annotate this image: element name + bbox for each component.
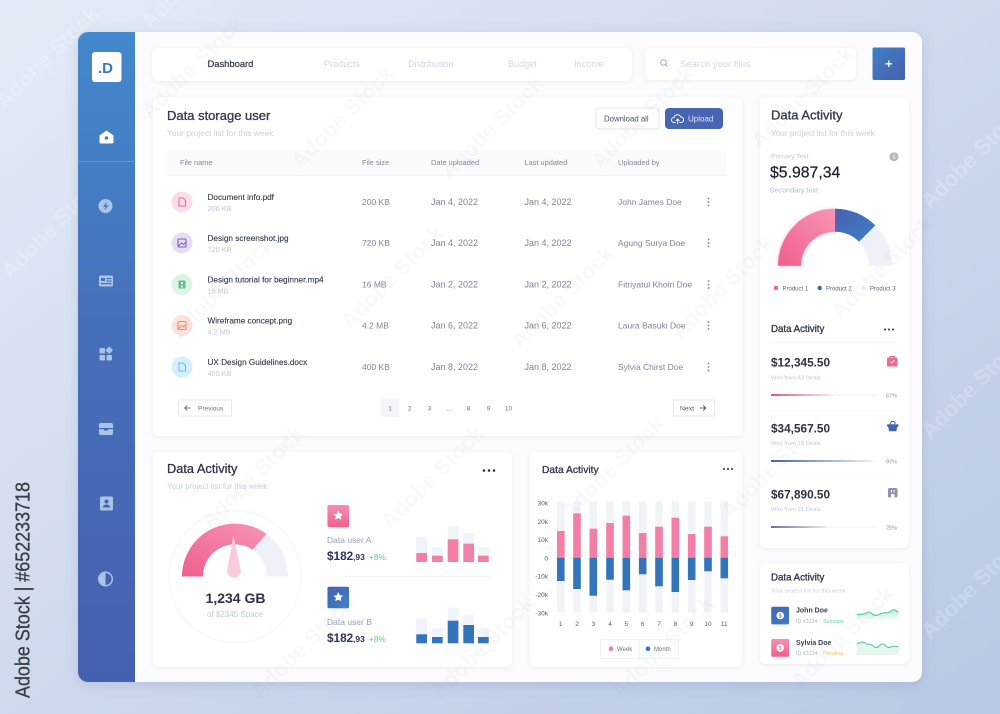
deal metric 2: Won from 18 Deals — [771, 441, 821, 447]
subheading: Your project list for this week — [771, 129, 876, 138]
watermark: Adobe Stock — [506, 240, 619, 354]
subheading: Your project list for this week — [167, 128, 274, 138]
search bar — [645, 48, 856, 80]
panel: storage gauge and users — [153, 452, 512, 667]
watermark: Adobe Stock — [136, 10, 249, 124]
watermark: Adobe Stock — [586, 60, 699, 174]
previous button: Previous — [198, 405, 224, 412]
user Sylvia: ID #3124 · — [796, 651, 821, 657]
nav bar — [152, 48, 632, 81]
bars — [557, 502, 728, 612]
donut legend: Product 3 — [870, 286, 896, 292]
upload button — [665, 108, 723, 129]
pagination — [381, 398, 512, 417]
sparkline Sylvia — [857, 642, 898, 655]
watermark: Adobe Stock — [286, 60, 399, 174]
table row 4: Jan 6, 2022 — [524, 320, 572, 330]
icon: contrast — [98, 572, 113, 586]
axis labels: 9 — [690, 621, 694, 628]
heading: Data Activity — [542, 465, 600, 476]
table row 5: Jan 8, 2022 — [431, 362, 478, 372]
deal metric 2 — [771, 421, 898, 465]
data user A — [327, 505, 386, 563]
deal metric 3: $67,890.50 — [771, 487, 830, 501]
stock credit: Adobe Stock | #652233718 — [12, 482, 34, 698]
table row 5: 400 KB — [362, 362, 390, 372]
data user B: Data user B — [327, 617, 372, 627]
sparkline John — [857, 610, 898, 619]
user Sylvia: $ — [779, 646, 782, 652]
logo: .D — [98, 60, 113, 77]
watermark — [136, 10, 939, 704]
nav bar: Distribution — [408, 59, 454, 69]
table row 4: Laura Basuki Doe — [618, 320, 686, 330]
heading: Data storage user — [167, 108, 271, 123]
watermark: Adobe Stock — [246, 590, 359, 704]
panel: data storage table — [153, 97, 742, 436]
user John: $ — [779, 614, 782, 620]
icon: briefcase — [887, 356, 898, 366]
legend — [600, 640, 678, 658]
axis labels: 5 — [624, 621, 628, 628]
table header: Uploaded by — [618, 158, 660, 167]
table header: Date uploaded — [431, 158, 479, 167]
axis labels: 2 — [575, 621, 579, 628]
primary metric — [770, 154, 840, 194]
data user A: +8% — [369, 552, 386, 562]
deal metric 2: $34,567.50 — [771, 421, 830, 435]
table row 2: Jan 4, 2022 — [524, 238, 572, 248]
watermark: Adobe Stock — [606, 590, 719, 704]
data user B: ,93 — [353, 634, 365, 644]
table header: File size — [362, 158, 389, 167]
table header: Last updated — [524, 158, 567, 167]
sidebar — [78, 32, 135, 682]
upload button: Upload — [688, 114, 713, 124]
table row 1: Document info.pdf — [208, 193, 275, 202]
table row 4: Jan 6, 2022 — [431, 320, 478, 330]
menu dots — [884, 328, 894, 330]
gauge chart — [169, 510, 301, 642]
axis labels: -30k — [535, 610, 549, 618]
deal metric 1: 67% — [886, 394, 897, 400]
watermark: Adobe Stock — [556, 410, 669, 524]
watermark: Adobe Stock — [786, 580, 899, 694]
user Sylvia: Pending — [823, 651, 843, 657]
user John — [771, 607, 844, 625]
icon: bolt — [98, 199, 112, 213]
data user B: +8% — [369, 634, 386, 644]
pagination: 8 — [467, 405, 471, 412]
data user B — [327, 587, 386, 645]
table row 1: Jan 4, 2022 — [524, 197, 572, 207]
deal metric 3: Won from 21 Deals — [771, 507, 821, 513]
table row 5 — [172, 356, 709, 378]
donut legend: Product 2 — [826, 286, 852, 292]
table row 2: Agung Surya Doe — [618, 238, 685, 248]
heading: Data Activity — [167, 461, 238, 476]
axis labels: 30k — [538, 500, 549, 508]
primary metric: Secondary text — [770, 186, 818, 194]
deal metric 3 — [771, 487, 898, 531]
menu dots — [483, 469, 495, 472]
axis labels: -10k — [535, 574, 549, 580]
deal metric 3: 25% — [886, 525, 897, 531]
axis labels: 4 — [608, 621, 612, 628]
user John: Success — [823, 619, 844, 625]
add button — [872, 48, 905, 80]
axis labels: 1 — [559, 621, 563, 628]
table row 3: 16 MB — [362, 280, 387, 290]
table row 5: UX Design Guidelines.docx — [208, 358, 307, 367]
user Sylvia: Sylvia Doe — [796, 640, 832, 647]
nav bar: Income — [574, 59, 604, 69]
donut chart — [778, 209, 892, 266]
panel: recent activity — [760, 563, 909, 664]
mini bar chart A — [416, 526, 489, 562]
axis labels: 10 — [704, 621, 712, 628]
table row 3 — [172, 274, 709, 296]
axis labels: 8 — [673, 621, 677, 628]
heading: Data Activity — [771, 108, 843, 122]
table row 1: John James Doe — [618, 197, 682, 207]
table row 1 — [172, 192, 709, 213]
watermark: Adobe Stock — [716, 410, 829, 524]
axis labels: 0 — [544, 556, 548, 562]
nav bar: Dashboard — [208, 58, 253, 69]
legend: Week — [617, 647, 633, 653]
primary metric: Primary Text — [771, 154, 809, 160]
pagination: 10 — [505, 405, 512, 412]
axis labels: 7 — [657, 621, 661, 628]
watermark: Adobe Stock — [336, 220, 449, 334]
watermark: Adobe Stock — [426, 590, 539, 704]
user John: ID #3124 · — [796, 619, 821, 625]
table row 3: Jan 2, 2022 — [524, 280, 572, 290]
table row 3: Fitriyatul Khoiri Doe — [618, 280, 692, 290]
table row 4: 4.2 MB — [362, 320, 389, 330]
table header: File name — [180, 158, 212, 167]
deal metric 2: 97% — [886, 459, 897, 465]
table row 1: 200 KB — [208, 204, 232, 213]
panel: diverging bar chart — [530, 452, 742, 667]
axis labels: 3 — [591, 621, 595, 628]
subheading: Your project list for this week — [167, 482, 267, 491]
deal metric 1: $12,345.50 — [771, 356, 830, 370]
heading: Data Activity — [771, 573, 824, 584]
table row 3: Design tutorial for beginner.mp4 — [208, 276, 324, 284]
icon: id card — [99, 276, 113, 286]
table row 4 — [172, 315, 709, 336]
watermark: Adobe Stock — [666, 230, 779, 344]
mini bar chart B — [416, 608, 489, 643]
axis labels: 6 — [641, 621, 645, 628]
menu dots — [723, 468, 733, 470]
deal metric 1: Won from 43 Deals — [771, 376, 821, 382]
watermark: Adobe Stock — [196, 420, 309, 534]
panel: right summary column — [760, 97, 909, 548]
search bar: Search your files — [680, 59, 751, 70]
watermark: Adobe Stock — [746, 40, 859, 154]
table row 5: 400 KB — [208, 369, 232, 378]
data user A: Data user A — [327, 535, 372, 545]
table row 5: Sylvia Chirst Doe — [618, 362, 683, 372]
legend: Month — [654, 647, 671, 653]
axis labels — [535, 500, 728, 628]
table row 1: Jan 4, 2022 — [431, 197, 478, 207]
watermark: Adobe Stock — [436, 70, 549, 184]
data user B: $182 — [327, 631, 354, 645]
section heading: Data Activity — [771, 324, 824, 335]
nav bar: Products — [324, 59, 360, 69]
axis labels: 20k — [538, 519, 549, 526]
table row 4: Wireframe concept.png — [208, 316, 293, 326]
table row 2: 720 KB — [208, 245, 232, 254]
nav bar: Budget — [508, 59, 537, 69]
user John: John Doe — [796, 607, 828, 614]
axis labels: 10k — [538, 537, 549, 544]
watermark: Adobe Stock — [376, 420, 489, 534]
next button — [674, 400, 714, 416]
pagination: 1 — [388, 405, 392, 412]
dashboard window — [78, 32, 922, 682]
logo — [92, 52, 122, 82]
pagination: ... — [447, 405, 452, 412]
icon: store — [888, 488, 898, 498]
primary metric: $5.987,34 — [770, 164, 840, 182]
pagination: 2 — [408, 405, 412, 412]
table row 2 — [172, 232, 709, 254]
icon: search — [661, 60, 668, 67]
table row 3: 16 MB — [208, 286, 229, 296]
next button: Next — [680, 405, 694, 412]
icon: basket — [887, 422, 898, 431]
gauge chart: 1,234 GB — [206, 590, 265, 606]
data user A: ,93 — [353, 552, 365, 562]
table row 2: Design screenshot.jpg — [208, 234, 289, 243]
gauge chart: of $2345 Space — [207, 610, 264, 619]
watermark: Adobe Stock — [826, 210, 939, 324]
watermark: Adobe Stock — [166, 230, 279, 344]
table row 4: 4.2 MB — [208, 328, 231, 336]
data user A: $182 — [327, 549, 354, 563]
icon: info — [890, 152, 898, 161]
pagination: 9 — [487, 405, 491, 412]
deal metric 1 — [771, 356, 898, 400]
table row 2: Jan 4, 2022 — [431, 238, 478, 248]
icon: contacts — [100, 496, 113, 510]
download button: Download all — [604, 114, 649, 124]
donut legend — [774, 286, 896, 292]
subheading: Your project list for this week — [771, 588, 846, 594]
donut legend: Product 1 — [782, 286, 809, 292]
icon: widgets — [100, 346, 113, 360]
user Sylvia — [771, 639, 843, 657]
previous button — [178, 400, 232, 416]
axis labels: 11 — [721, 621, 728, 628]
table row 3: Jan 2, 2022 — [431, 280, 478, 290]
table row 1: 200 KB — [362, 197, 390, 207]
table header — [167, 150, 727, 176]
axis labels: -20k — [535, 592, 549, 599]
download button — [596, 108, 659, 129]
icon: home — [100, 130, 114, 144]
table row 2: 720 KB — [362, 238, 390, 248]
icon: inbox — [99, 423, 113, 435]
pagination: 3 — [428, 405, 432, 412]
table row 5: Jan 8, 2022 — [524, 362, 572, 372]
